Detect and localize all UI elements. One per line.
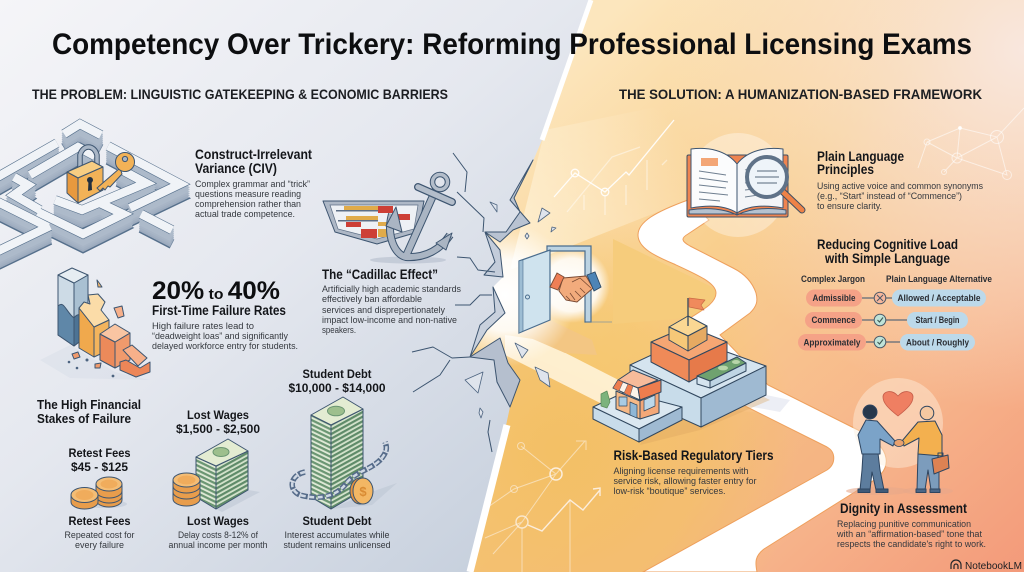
- row: commence: [805, 312, 968, 328]
- cadillac body: effectively ban affordable: [322, 294, 422, 305]
- flying rock fragments: [465, 202, 556, 418]
- text block: dignity in assessment: [836, 501, 986, 550]
- light burst behind crack: [433, 223, 610, 367]
- cadillac body: services and disprepertionately: [322, 305, 445, 316]
- stat: retest fees: [64, 446, 135, 550]
- risk body: [614, 466, 757, 497]
- debt amount: $10,000 - $14,000: [288, 381, 386, 395]
- stat body: “deadweight loas” and significantly: [152, 331, 288, 342]
- plain language body: [817, 181, 983, 212]
- dignity body: Replacing punitive communication: [837, 519, 971, 530]
- debt description: student remains unlicensed: [284, 540, 391, 550]
- risk heading: Risk-Based Regulatory Tiers: [614, 448, 774, 463]
- stat: failure rates: [152, 277, 298, 352]
- cash tier: [697, 357, 746, 388]
- sunlit zone beside door: [613, 239, 716, 324]
- column headers: Plain Language Alternative: [886, 274, 992, 284]
- cadillac body: Artificially high academic standards: [322, 284, 461, 295]
- text block: cadillac effect: [322, 266, 461, 336]
- row: approximately: Approximately: [804, 338, 861, 348]
- crack rock facets: [412, 153, 533, 452]
- plain language heading: Principles: [817, 162, 874, 177]
- icon: open book with magnifier: [687, 133, 802, 237]
- wages amount: Lost Wages: [187, 408, 249, 422]
- risk body: Aligning license requirements with: [614, 466, 748, 477]
- CIV heading: Variance (CIV): [195, 161, 277, 176]
- dignity body: [836, 519, 986, 550]
- cadillac body: impact low-income and non-native: [322, 315, 457, 326]
- flag: [688, 298, 705, 326]
- row: admissible: Admissible: [812, 293, 856, 304]
- plain language body: (e.g., “Start” instead of “Commence”): [817, 191, 962, 202]
- stat: student debt: [284, 367, 397, 550]
- shop: [613, 370, 661, 419]
- icon: open door with handshake: [519, 246, 612, 333]
- heading: financial stakes: Stakes of Failure: [37, 411, 131, 426]
- decorative growth chart top: [554, 120, 674, 215]
- icon: cadillac crest and anchor: [323, 174, 452, 264]
- figure: right person: [902, 406, 949, 492]
- risk body: low-risk “boutique” services.: [614, 486, 726, 497]
- icon: chained cash stack: [292, 397, 397, 509]
- CIV body: actual trade competence.: [195, 209, 295, 220]
- orange tier: [651, 326, 727, 382]
- stat body: [152, 321, 298, 352]
- heading: financial stakes: The High Financial: [37, 397, 141, 412]
- dignity heading: Dignity in Assessment: [840, 501, 967, 516]
- row: admissible: Allowed / Acceptable: [898, 293, 980, 304]
- icon: dignity handshake figures: [846, 378, 953, 495]
- icon: handshake: [550, 272, 601, 302]
- debt description: Interest accumulates while: [284, 530, 390, 540]
- icon: chained cash stack: $: [359, 484, 367, 499]
- text block: plain language principles: [817, 149, 983, 212]
- stat heading: First-Time Failure Rates: [152, 303, 286, 318]
- icon: heart: [883, 392, 913, 416]
- dignity body: with an “affirmation-based” tone that: [836, 529, 982, 540]
- title: Competency Over Trickery: Reforming Professional Licensing Exams: [52, 28, 972, 61]
- debt description: [284, 530, 391, 550]
- cadillac body: [322, 284, 461, 336]
- column headers: Complex Jargon: [801, 274, 865, 284]
- shop platform: [593, 392, 682, 442]
- panel: reducing cognitive load: [798, 237, 992, 350]
- winding white road: [470, 200, 886, 572]
- debt caption: Student Debt: [302, 514, 372, 528]
- plain language heading: Plain Language: [817, 149, 904, 164]
- retest amount: $45 - $125: [71, 460, 128, 474]
- CIV body: questions measure reading: [195, 189, 301, 200]
- heading: the solution: THE SOLUTION: A HUMANIZATION-BASED FRAMEWORK: [619, 86, 982, 102]
- panel: problem background with cracked wall: [0, 0, 591, 572]
- wages amount: [176, 408, 260, 436]
- risk body: service risk, allowing faster entry for: [614, 476, 757, 487]
- retest amount: [68, 446, 131, 474]
- figure: left person: [858, 405, 895, 492]
- stat: lost wages: [168, 408, 268, 550]
- row: commence: Start / Begin: [916, 315, 960, 326]
- icon: crumbling bars: [40, 268, 150, 380]
- row: commence: Commence: [812, 315, 856, 326]
- stat body: High failure rates lead to: [152, 321, 254, 332]
- row: approximately: About / Roughly: [906, 338, 970, 348]
- icon: coins: [71, 477, 127, 509]
- CIV heading: [195, 147, 312, 176]
- CIV heading: Construct-Irrelevant: [195, 147, 312, 162]
- decorative network lines top right: [918, 108, 1024, 180]
- stat number: 20% to 40%: [152, 277, 280, 305]
- debt amount: [288, 367, 386, 395]
- cadillac heading: The “Cadillac Effect”: [322, 266, 438, 282]
- clasped hands: [894, 440, 904, 446]
- retest description: Repeated cost for: [64, 530, 135, 540]
- plain language heading: [817, 149, 904, 177]
- money plant: [601, 391, 610, 408]
- heading: the problem: THE PROBLEM: LINGUISTIC GATEKEEPING & ECONOMIC BARRIERS: [32, 86, 448, 102]
- CIV body: comprehension rather than: [195, 199, 301, 210]
- retest description: every failure: [75, 540, 124, 550]
- column headers: [801, 274, 992, 284]
- debt amount: Student Debt: [302, 367, 372, 381]
- retest caption: Retest Fees: [68, 514, 131, 528]
- plain language body: to ensure clarity.: [817, 201, 882, 212]
- logo: NotebookLM: NotebookLM: [965, 560, 1022, 572]
- row: approximately: [798, 334, 975, 350]
- heading: financial stakes: [37, 397, 141, 426]
- plain language body: Using active voice and common synonyms: [817, 181, 983, 192]
- icon: tiered building: [593, 298, 770, 445]
- CIV body: Complex grammar and “trick”: [195, 179, 310, 190]
- wages amount: $1,500 - $2,500: [176, 422, 260, 436]
- cognitive load heading: [817, 237, 958, 266]
- text block: construct-irrelevant variance: [195, 147, 312, 220]
- retest amount: Retest Fees: [68, 446, 131, 460]
- retest description: [64, 530, 135, 550]
- icon: cash stack and coins: [173, 439, 260, 512]
- wages caption: Lost Wages: [187, 514, 249, 528]
- decorative growth chart bottom: [485, 441, 600, 572]
- cognitive load heading: with Simple Language: [824, 251, 950, 266]
- row: admissible: [806, 290, 986, 306]
- cognitive load heading: Reducing Cognitive Load: [817, 237, 958, 252]
- CIV body: [195, 179, 310, 220]
- light beam and door shadow: [505, 320, 650, 412]
- stat body: delayed workforce entry for students.: [152, 341, 298, 352]
- wages description: Delay costs 8-12% of: [178, 530, 259, 540]
- text block: risk-based regulatory tiers: [614, 448, 774, 497]
- base tier: [630, 338, 766, 427]
- icon: maze with padlock and key: [0, 124, 180, 267]
- top box: [669, 316, 707, 351]
- wages description: annual income per month: [168, 540, 268, 550]
- wages description: [168, 530, 268, 550]
- dignity body: respects the candidate's right to work.: [837, 539, 986, 550]
- cadillac body: speakers.: [322, 325, 356, 336]
